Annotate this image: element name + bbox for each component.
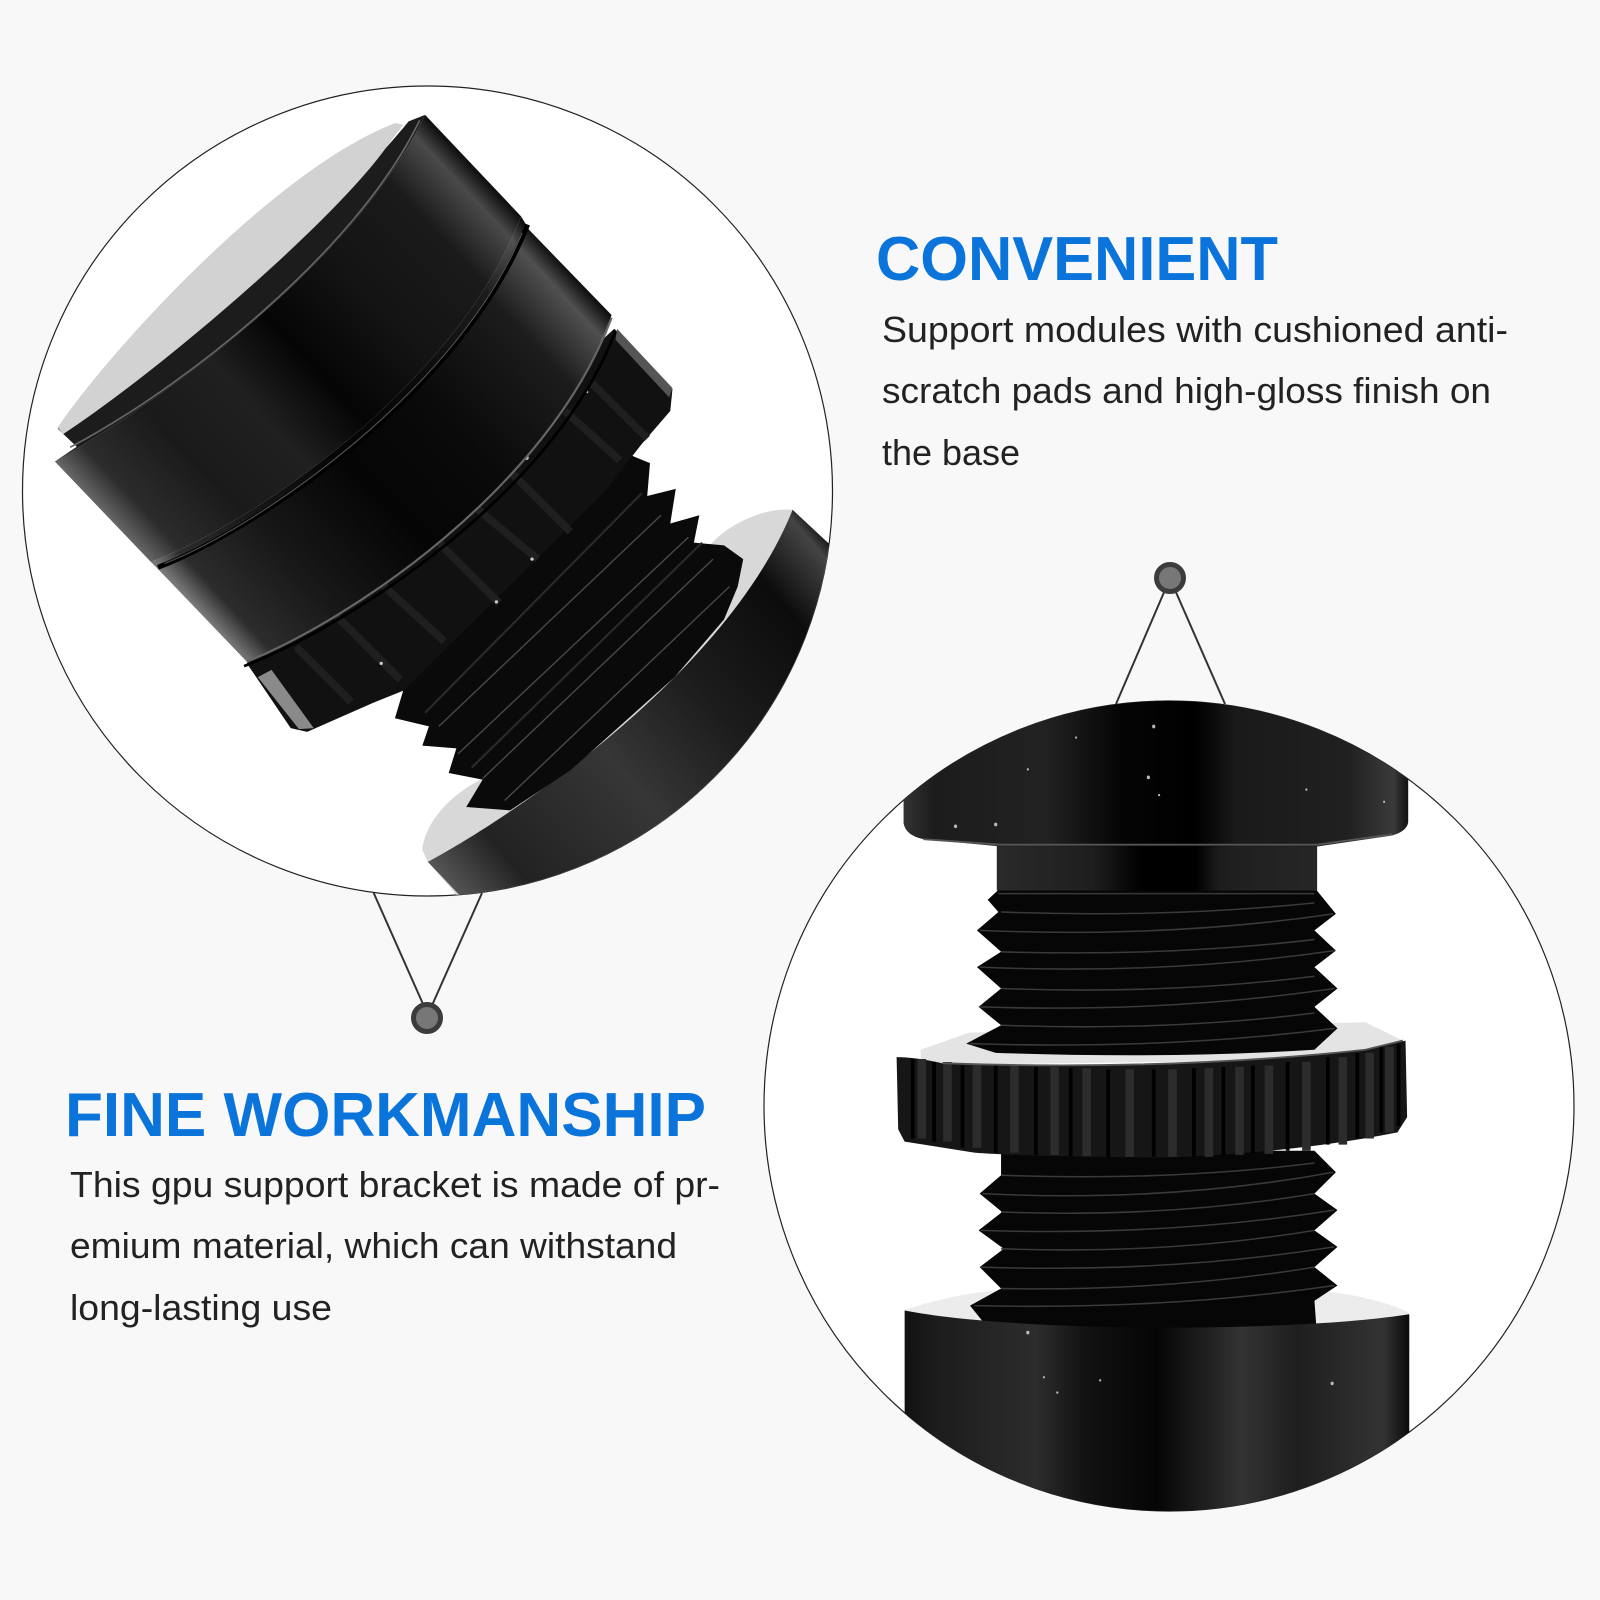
bolt: felt pad [55, 115, 425, 462]
body text: convenient: Support modules with cushioned anti- [882, 309, 1508, 350]
lower thread [970, 1151, 1337, 1337]
knurled nut [897, 1022, 1407, 1158]
body text: convenient: scratch pads and high-gloss finish on [882, 370, 1491, 411]
lower cylinder [904, 1310, 1410, 1511]
body text: fine workmanship: emium material, which can withstand [70, 1225, 677, 1266]
bolt: top cylinder section [55, 115, 528, 567]
text block: convenient [876, 225, 1508, 473]
body text: convenient [882, 309, 1508, 473]
bolt: knurled collar [247, 329, 672, 732]
bolt: middle cylinder section [151, 216, 615, 666]
body text: convenient: the base [882, 432, 1020, 473]
bolt: lower flange [422, 510, 829, 895]
text block: fine workmanship [65, 1081, 720, 1328]
upper thread [966, 888, 1337, 1055]
bolt: threaded shaft [384, 444, 743, 810]
heading: fine workmanship: FINE WORKMANSHIP [65, 1081, 706, 1150]
heading: convenient: CONVENIENT [876, 225, 1278, 294]
neck [997, 843, 1317, 891]
body text: fine workmanship: This gpu support bracket is made of pr- [70, 1164, 720, 1205]
body text: fine workmanship: long-lasting use [70, 1287, 332, 1328]
connector: lower-right circle to dot [1116, 564, 1225, 704]
lower cylinder top face [904, 1290, 1410, 1324]
panel: photo circle, angled bolt [22, 85, 834, 897]
connector: top-left circle to dot [374, 893, 482, 1032]
panel: photo circle, front-view bolt [764, 682, 1574, 1570]
head [904, 701, 1408, 846]
body text: fine workmanship [70, 1164, 720, 1328]
